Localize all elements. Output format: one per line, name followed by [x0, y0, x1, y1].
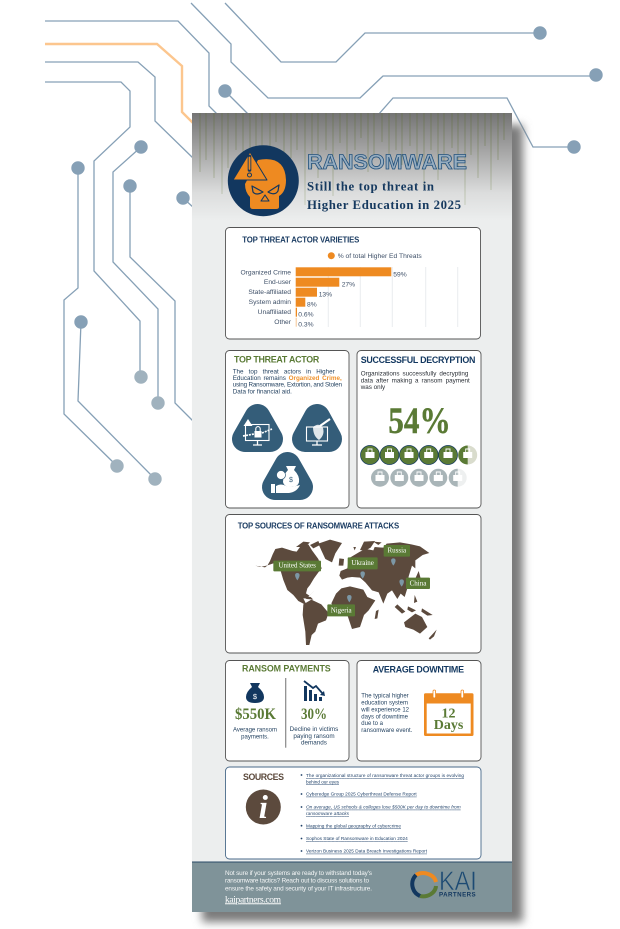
bar chart: Other — [274, 319, 292, 326]
label: Nigeria — [327, 604, 355, 616]
panel drop shadow — [202, 125, 523, 922]
stat: decline in victims: demands — [301, 740, 327, 747]
label: Russia — [384, 545, 410, 557]
big number: 54% — [388, 401, 451, 442]
paragraph: Organizations successfully decrypting — [361, 371, 469, 378]
map labels — [273, 545, 430, 616]
call to action text — [225, 870, 372, 893]
website link: kaipartners.com — [225, 895, 282, 905]
divider — [285, 678, 287, 748]
label: China — [406, 578, 430, 589]
source list: Sophos State of Ransomware in Education 2024 — [306, 836, 408, 841]
label: United States: United States — [278, 562, 316, 570]
icon: money bag in hand: $ — [289, 477, 293, 484]
source list: Cyberedge Group 2025 Cyberthreat Defense Report — [306, 792, 417, 797]
label: Russia: Russia — [388, 547, 406, 555]
label: Ukraine — [348, 557, 378, 569]
label: Nigeria: Nigeria — [331, 606, 352, 614]
bar chart: 27% — [342, 282, 355, 289]
bar chart: System admin — [249, 299, 291, 306]
footer band — [192, 862, 512, 912]
title: RANSOMWARE — [307, 150, 467, 174]
paragraph: Data for financial aid. — [233, 389, 292, 396]
icon: calendar 12 days: 12 — [442, 707, 456, 722]
icon: information — [246, 790, 281, 826]
bar chart: State-affiliated — [248, 289, 291, 296]
paragraph: was only — [360, 384, 386, 391]
panel: top sources of ransomware attacks — [226, 514, 481, 653]
heading: TOP THREAT ACTOR VARIETIES — [242, 236, 359, 245]
bar chart: 0.6% — [298, 312, 314, 319]
heading: SUCCESSFUL DECRYPTION — [361, 355, 475, 365]
stat: average ransom: payments. — [241, 734, 269, 740]
paragraph: using Ransomware, Extortion, and Stolen — [233, 382, 342, 389]
icon: hacked monitor — [305, 417, 330, 445]
bar chart: End-user — [264, 279, 292, 286]
stat: average ransom: Average ransom — [233, 728, 277, 734]
panel: average downtime — [357, 660, 481, 761]
subtitle: Still the top threat in — [307, 180, 434, 194]
header emblem: skull with warning sign — [228, 145, 299, 216]
subtitle — [307, 180, 461, 212]
bar chart: 13% — [319, 292, 332, 299]
bar chart: 8% — [307, 302, 317, 309]
source list: Mapping the global geography of cybercrime — [306, 823, 401, 828]
paragraph: The top threat actors in Higher — [233, 368, 335, 375]
icon: money bag in hand — [271, 465, 300, 493]
world map: americas and greenland — [255, 540, 342, 645]
call to action text: ransomware tactics? Reach out to discuss solutions to — [225, 878, 369, 885]
paragraph — [360, 693, 413, 734]
source list: Verizon Business 2025 Data Breach Investigations Report — [306, 849, 428, 854]
icon: information: i — [259, 790, 269, 826]
label: United States — [273, 561, 321, 571]
icon row: decrypted share — [360, 446, 477, 464]
paragraph: The typical higher — [361, 693, 409, 699]
main infographic panel — [192, 113, 512, 912]
paragraph — [233, 368, 342, 396]
icon: calendar 12 days: Days — [434, 718, 464, 733]
heading: TOP THREAT ACTOR — [234, 354, 320, 364]
icon: locked computer — [243, 417, 272, 445]
icon: money bag: $ — [253, 692, 258, 701]
paragraph: days of downtime — [361, 714, 409, 720]
bar chart — [240, 267, 458, 329]
bar chart: 59% — [393, 272, 407, 279]
heading: RANSOM PAYMENTS — [242, 663, 331, 673]
label: China: China — [410, 579, 426, 587]
heading: TOP SOURCES OF RANSOMWARE ATTACKS — [238, 522, 399, 531]
logo: KAI Partners: PARTNERS — [439, 892, 476, 898]
bar chart: 0.3% — [298, 322, 314, 329]
paragraph: ransomware event. — [361, 728, 413, 734]
icon: calendar 12 days — [424, 690, 474, 736]
heading: AVERAGE DOWNTIME — [373, 664, 464, 674]
icon: declining chart — [304, 681, 325, 701]
panel: ransom payments — [226, 660, 349, 761]
stat: decline in victims: paying ransom — [293, 733, 335, 740]
logo: KAI Partners: KAI — [439, 866, 477, 896]
panel: sources — [226, 767, 481, 859]
legend: % of total Higher Ed Threats — [338, 253, 422, 260]
stat: average ransom: $550K — [235, 706, 277, 723]
paragraph: due to a — [361, 721, 384, 727]
paragraph: data after making a ransom payment — [361, 377, 470, 384]
source list: The organizational structure of ransomware threat actor groups is evolving — [306, 773, 464, 778]
call to action text: Not sure if your systems are ready to withstand today's — [225, 870, 372, 877]
paragraph: education system — [361, 700, 408, 706]
paragraph: will experience 12 — [360, 707, 410, 713]
stat: decline in victims: Decline in victims — [290, 726, 338, 733]
panel: successful decryption — [357, 350, 481, 508]
map pins — [295, 558, 404, 602]
stat: decline in victims — [290, 706, 338, 747]
paragraph: Education remains Organized Crime, — [233, 375, 342, 382]
panel: top threat actor varieties — [226, 228, 480, 339]
source list: behind our eyes — [306, 779, 340, 784]
circuit board lines — [45, 3, 603, 486]
icon row: not decrypted share — [371, 469, 467, 487]
logo: KAI Partners — [412, 866, 477, 898]
heading: SOURCES — [243, 772, 284, 782]
source list — [301, 773, 464, 854]
source list: On average, US schools & colleges lose $500K per day to downtime from — [306, 805, 461, 810]
panel: top threat actor — [226, 350, 349, 508]
call to action text: ensure the safety and security of your IT infrastructure. — [225, 886, 372, 893]
paragraph — [360, 371, 470, 391]
bar chart: Unaffiliated — [258, 309, 291, 316]
label: Ukraine: Ukraine — [351, 559, 374, 567]
source list: ransomware attacks — [306, 811, 350, 816]
stat: decline in victims: 30% — [301, 706, 327, 723]
world map: eurasia, africa, oceania — [331, 541, 437, 640]
subtitle: Higher Education in 2025 — [307, 198, 461, 212]
stat: average ransom — [233, 706, 277, 740]
bar chart: Organized Crime — [240, 269, 291, 276]
